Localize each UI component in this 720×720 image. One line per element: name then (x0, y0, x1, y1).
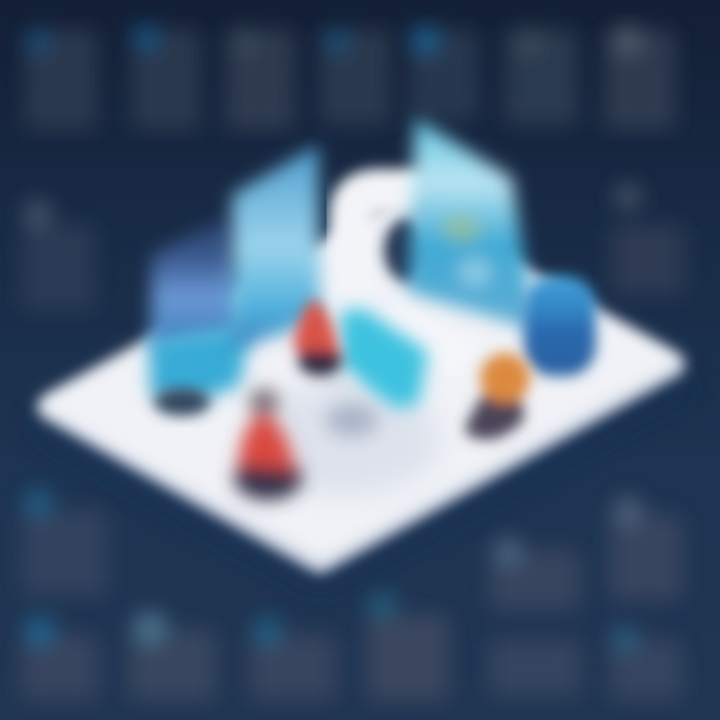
icon: blue cylinder (524, 276, 596, 376)
dark hole inside loop (384, 218, 432, 282)
white loop connector (352, 192, 415, 300)
panel: left lower cyan block (150, 325, 250, 402)
icon: orange figure (466, 353, 530, 440)
panel: left dark blue screen (150, 215, 245, 350)
platform shadow (30, 225, 695, 590)
platform edge (50, 212, 672, 560)
background tiles: middle row (22, 183, 684, 310)
platform top (52, 212, 664, 548)
panel: right tall screen (408, 118, 535, 330)
icon: white path on platform (375, 300, 480, 380)
icon: red figure front (234, 388, 302, 500)
icon: red figure centre (293, 298, 342, 376)
background tiles: top row (24, 24, 675, 130)
platform shading around objects (250, 385, 440, 495)
panel: central cyan device (340, 308, 428, 408)
platform (50, 212, 672, 560)
icon: small grey items (324, 375, 378, 437)
icon: dark base under left panel (154, 388, 210, 416)
panel: left light screen (232, 145, 320, 350)
background tiles: bottom rows (22, 488, 682, 700)
